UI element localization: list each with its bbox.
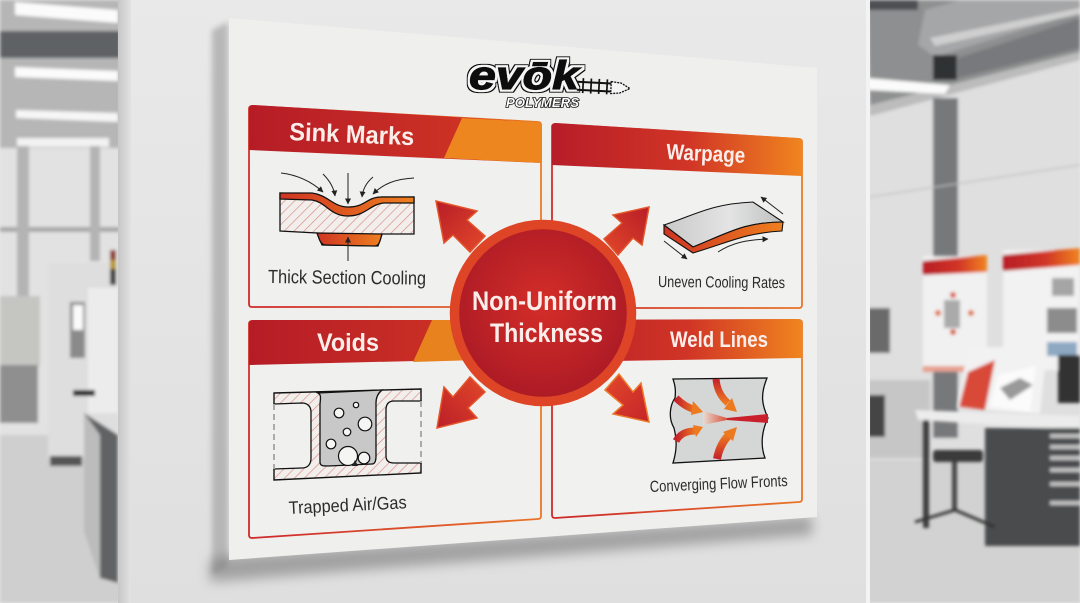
background: factory left <box>0 0 120 603</box>
caption: Converging Flow Fronts <box>649 473 788 496</box>
heading: Warpage <box>666 139 746 168</box>
panel card <box>249 321 541 538</box>
hub title <box>472 286 617 348</box>
logo <box>469 54 630 110</box>
header accent <box>444 118 542 163</box>
panel: weld lines <box>552 319 802 518</box>
panel card <box>249 106 541 307</box>
panel header <box>552 123 802 176</box>
logo wordmark: evōk <box>469 54 581 98</box>
caption: Thick Section Cooling <box>268 267 426 290</box>
diagram: converging flows <box>670 378 768 463</box>
sign board <box>229 18 817 560</box>
arrow: to sink marks <box>436 201 485 252</box>
background: factory right <box>868 0 1080 603</box>
background: posters <box>923 248 1080 414</box>
panel header <box>552 319 802 362</box>
central hub <box>436 201 649 428</box>
heading: Voids <box>317 329 379 357</box>
hub circle <box>454 224 632 402</box>
arrow: to weld lines <box>605 374 649 422</box>
panel card <box>552 124 802 308</box>
header accent <box>413 320 541 362</box>
panel card <box>552 320 802 518</box>
logo subtitle: POLYMERS <box>506 95 579 110</box>
panel: sink marks <box>249 105 542 307</box>
panel header <box>249 320 541 365</box>
panel header <box>249 105 542 163</box>
diagram: sink mark cross-section <box>280 173 414 261</box>
wall <box>118 0 870 603</box>
hub title: Non-Uniform <box>472 286 617 316</box>
arrow: to voids <box>437 377 485 428</box>
logo screw <box>577 78 630 96</box>
heading: Sink Marks <box>289 118 415 151</box>
panel: voids <box>249 320 541 538</box>
caption: Trapped Air/Gas <box>288 492 407 518</box>
panel: warpage <box>552 123 802 308</box>
heading: Weld Lines <box>670 327 768 352</box>
arrow: to warpage <box>604 207 649 255</box>
hub title: Thickness <box>490 318 603 348</box>
background: desk <box>915 410 1080 546</box>
caption: Uneven Cooling Rates <box>658 274 785 292</box>
diagram: I-beam void section <box>274 389 421 480</box>
diagram: warped plate <box>664 197 783 259</box>
